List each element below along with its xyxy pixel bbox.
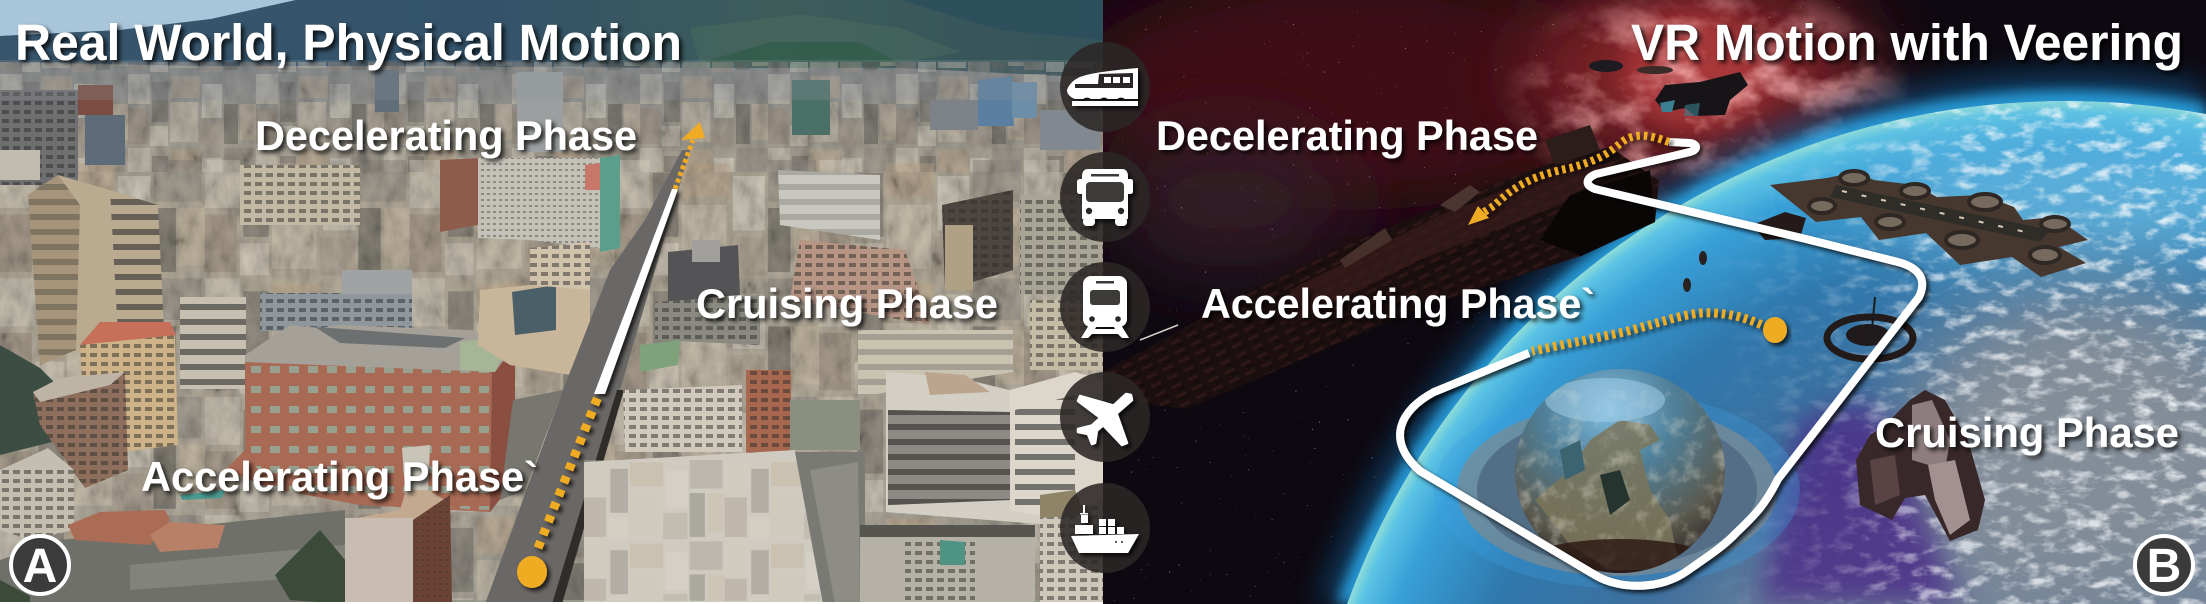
right of road blocks xyxy=(668,245,740,302)
foreground tower xyxy=(356,490,444,520)
badge B: B xyxy=(2147,540,2181,593)
arrowhead xyxy=(1468,206,1489,225)
brick hotel xyxy=(226,362,492,512)
icon: airplane xyxy=(1060,372,1150,462)
mid city blocks texture xyxy=(0,160,1104,600)
road xyxy=(485,150,690,604)
yellow dashed accelerating curve xyxy=(1532,313,1775,351)
ship: hexagonal carrier xyxy=(1752,171,2088,277)
badge A xyxy=(11,536,69,594)
mottled noise xyxy=(0,62,1103,602)
white block near road top xyxy=(478,158,600,248)
distant city blocks texture xyxy=(0,62,1103,172)
panel: VR space scene xyxy=(1070,0,2206,604)
ship: lower right cruiser xyxy=(1856,390,1985,541)
planet atmosphere glow xyxy=(1336,90,2206,604)
arrowhead xyxy=(681,122,705,140)
foreground-left building group xyxy=(180,297,246,389)
ship: small distant top xyxy=(1589,60,1748,116)
large white office xyxy=(886,372,1052,525)
icon: cargo ship xyxy=(1060,483,1150,573)
roofs bottom right xyxy=(860,537,1035,602)
bottom white blocks xyxy=(584,450,823,604)
ring station xyxy=(1827,297,1913,359)
label: VR cruising: Cruising Phase xyxy=(1875,409,2179,456)
title: VR: VR Motion with Veering xyxy=(1631,14,2183,71)
left tall tower xyxy=(28,175,165,365)
label: VR accelerating: Accelerating Phase` xyxy=(1201,280,1595,327)
faded top haze xyxy=(0,60,1103,100)
physical motion path arrow xyxy=(517,122,705,588)
badge A: A xyxy=(23,540,57,593)
yellow dashed decelerating curve xyxy=(1478,136,1669,216)
nebula glow xyxy=(1070,0,1630,210)
tiny drones xyxy=(1683,251,1707,292)
yellow dashed accelerating segment xyxy=(538,394,599,548)
start dot xyxy=(1763,317,1787,343)
ship: large battlecruiser xyxy=(1103,125,1659,409)
icon: tram xyxy=(1060,262,1150,352)
label: VR decelerating: Decelerating Phase xyxy=(1156,112,1538,159)
planet outer haze xyxy=(1316,71,2206,604)
label: real cruising: Cruising Phase xyxy=(696,280,998,327)
sky xyxy=(0,0,296,36)
upper left pale block xyxy=(0,150,40,180)
badge B xyxy=(2135,536,2193,594)
nebula wisps xyxy=(1509,0,1906,201)
ringed planet xyxy=(1434,369,1800,591)
icon: bus xyxy=(1060,152,1150,242)
icon: train xyxy=(1060,42,1150,132)
yellow dashed decelerating segment xyxy=(675,140,693,189)
title: real world: Real World, Physical Motion xyxy=(15,14,682,71)
centre blocks xyxy=(478,285,590,375)
mountains xyxy=(0,0,1103,78)
ground and parking bottom left xyxy=(0,510,345,604)
divider icons column xyxy=(1060,42,1150,573)
stars xyxy=(1103,0,1903,604)
distant towers xyxy=(0,90,78,185)
white cruising segment xyxy=(594,189,678,394)
VR veering path arrow xyxy=(1400,136,1922,586)
start dot xyxy=(517,556,547,588)
big planet xyxy=(1347,100,2206,604)
panel: real world city aerial photo xyxy=(0,0,1104,604)
label: real accelerating: Accelerating Phase` xyxy=(141,453,538,500)
white cruising curve xyxy=(1400,142,1922,586)
label: real decelerating: Decelerating Phase xyxy=(255,112,637,159)
